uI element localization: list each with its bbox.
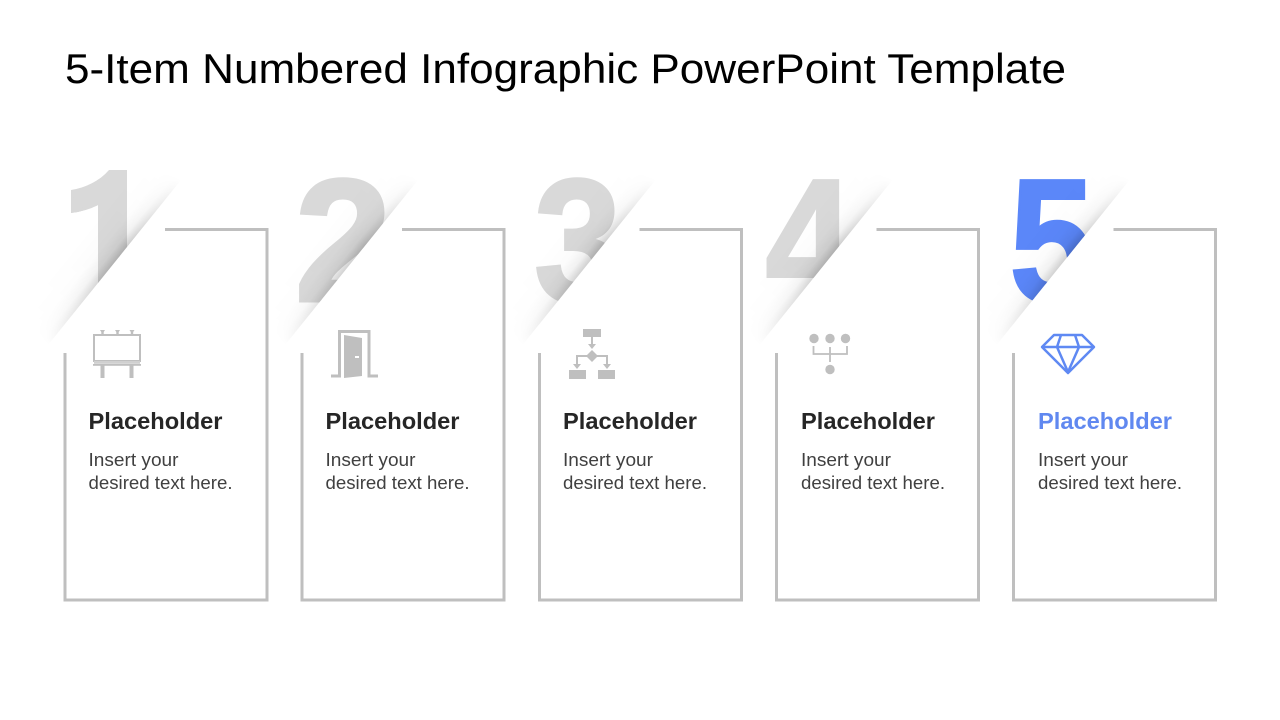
heading 2: Placeholder	[326, 408, 460, 434]
body text 2: Insert your	[326, 450, 416, 470]
card outline 5	[1014, 230, 1216, 600]
panel: item 1	[58, 170, 268, 602]
icon: flowchart	[569, 329, 615, 379]
panel: item 4	[766, 179, 980, 602]
icon: diamond	[1042, 335, 1094, 373]
card outline 2	[302, 230, 504, 600]
number 1: 1	[55, 144, 152, 339]
number 4: 4	[766, 143, 853, 339]
heading 4: Placeholder	[801, 408, 935, 434]
heading 3: Placeholder	[563, 408, 697, 434]
card outline 4	[776, 230, 978, 600]
icon: hierarchy dots	[809, 334, 850, 374]
panel: item 5	[1006, 179, 1217, 602]
heading 5: Placeholder	[1038, 408, 1172, 434]
body text 3: desired text here.	[563, 473, 707, 493]
panel: item 2	[294, 177, 506, 602]
body text 1: desired text here.	[88, 473, 232, 493]
body text 5: desired text here.	[1038, 473, 1182, 493]
fold shadow 3	[532, 192, 646, 332]
number 3: 3	[534, 143, 622, 339]
body text 4: desired text here.	[801, 473, 945, 493]
body text 4: Insert your	[801, 450, 891, 470]
icon: billboard	[93, 330, 141, 378]
panel: item 3	[532, 177, 743, 602]
fold shadow 4	[769, 192, 882, 332]
body text 3: Insert your	[563, 450, 653, 470]
fold shadow 5	[1006, 192, 1120, 332]
card outline 1	[65, 230, 267, 600]
fold shadow 1	[58, 192, 171, 332]
fold shadow 2	[294, 192, 408, 332]
number 2: 2	[294, 144, 392, 339]
title: 5-Item Numbered Infographic PowerPoint Template	[65, 45, 1066, 92]
number 1	[71, 170, 127, 283]
number 5: 5	[1010, 143, 1094, 338]
body text 2: desired text here.	[326, 473, 470, 493]
body text 1: Insert your	[88, 450, 178, 470]
icon: door	[331, 332, 378, 378]
card outline 3	[540, 230, 742, 600]
heading 1: Placeholder	[88, 408, 223, 434]
body text 5: Insert your	[1038, 450, 1128, 470]
